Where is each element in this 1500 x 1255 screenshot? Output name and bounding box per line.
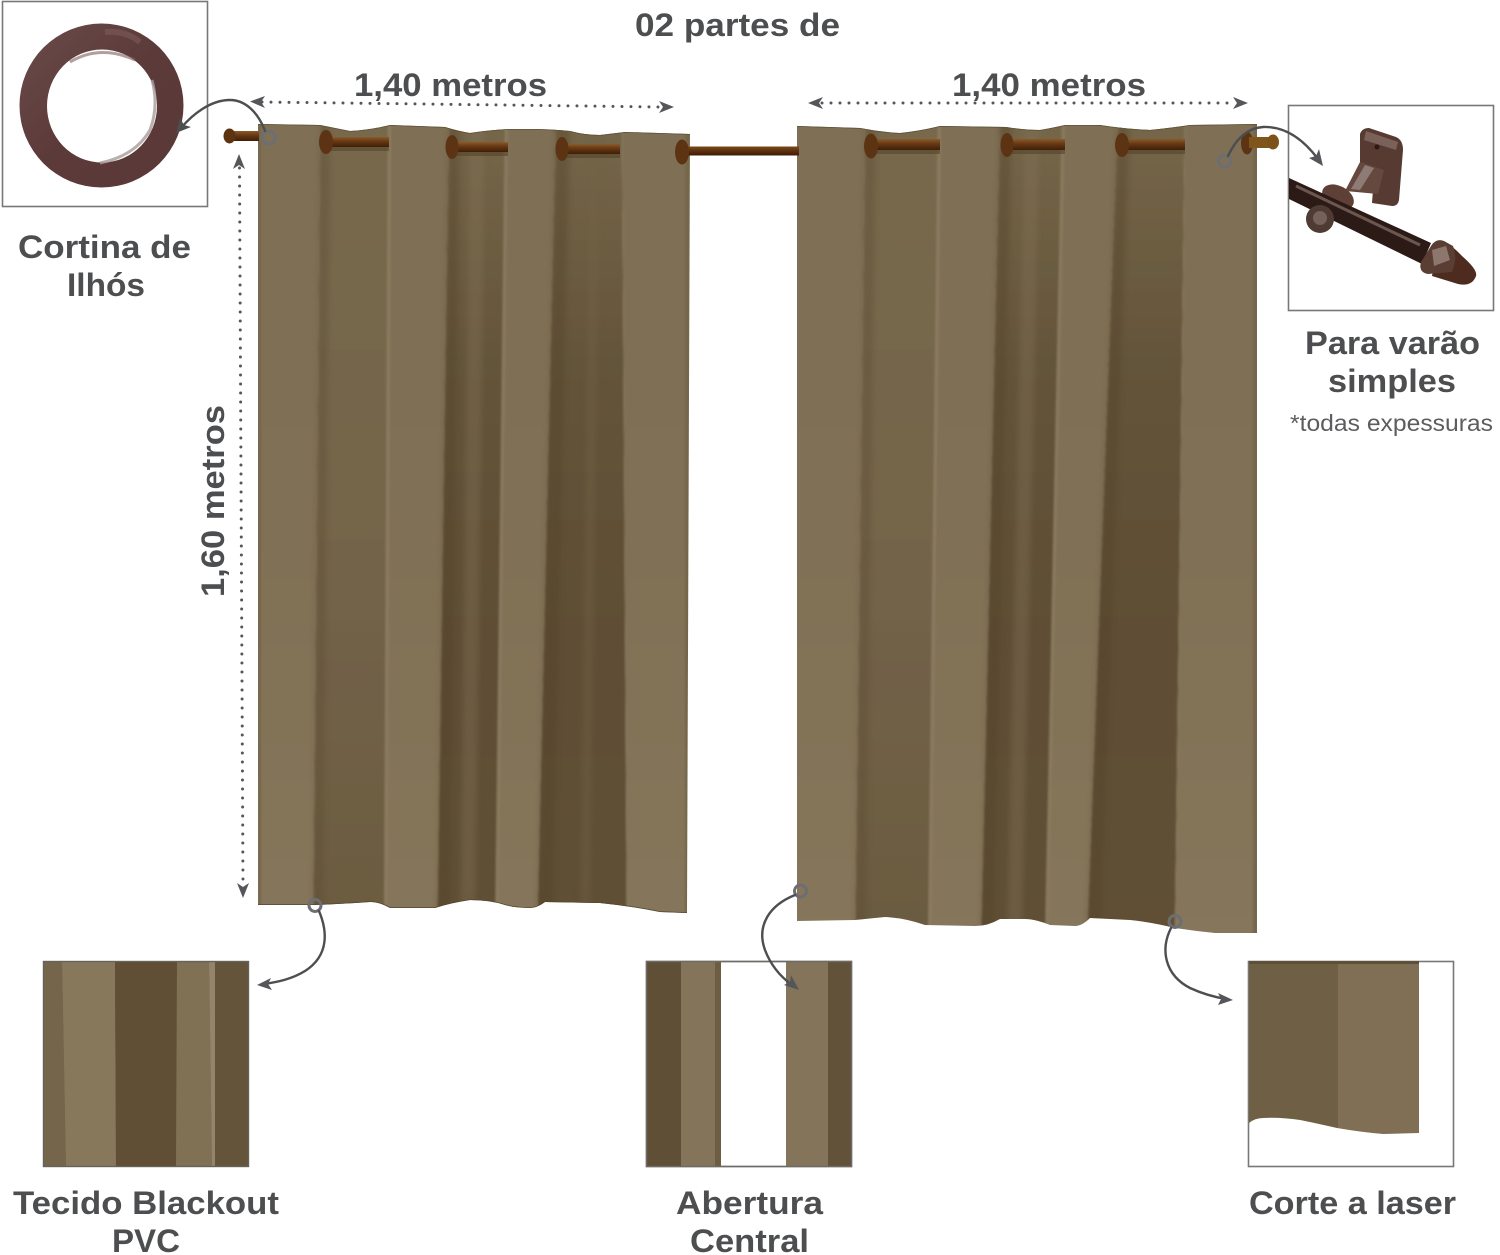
dimension: height: 1,60 metros — [195, 405, 231, 597]
arrow: hem to fabric detail — [257, 900, 325, 990]
arrow: curtain edge to opening detail — [762, 885, 806, 990]
label: Para varão simples: simples — [1328, 363, 1456, 399]
dimension: width left — [250, 67, 674, 113]
label: Abertura Central — [676, 1185, 823, 1255]
panel: grommet detail — [2, 2, 208, 206]
dimension: width right: 1,40 metros — [952, 67, 1146, 103]
right curtain grommets — [864, 132, 1279, 158]
arrow: curtain top to rod — [1218, 127, 1323, 167]
centre rod — [688, 146, 799, 156]
panel: laser cut detail — [1248, 961, 1454, 1166]
icon: curtain rod bracket — [1289, 128, 1476, 285]
left curtain grommets — [319, 130, 689, 164]
dimension: width right — [808, 67, 1248, 109]
arrow: curtain top to grommet — [176, 100, 276, 144]
label: Cortina de Ilhós: Ilhós — [67, 267, 145, 303]
label: Tecido Blackout PVC — [13, 1185, 279, 1255]
dimension: height — [195, 154, 249, 898]
curtain rod with grommets — [224, 128, 1279, 164]
icon: brown grommet ring — [20, 23, 184, 187]
right curtain panel — [790, 110, 1265, 940]
label: Para varão simples: *todas expessuras — [1290, 410, 1493, 436]
label: Tecido Blackout PVC: Tecido Blackout — [13, 1185, 279, 1221]
left finial — [224, 128, 259, 144]
left curtain panel — [250, 110, 700, 940]
label: Cortina de Ilhós: Cortina de — [18, 229, 191, 265]
label: Abertura Central: Abertura — [676, 1185, 823, 1221]
arrow: hem to laser cut detail — [1165, 916, 1233, 1005]
panel: rod detail — [1288, 106, 1494, 310]
label: Para varão simples — [1290, 325, 1493, 436]
title: 02 partes de — [635, 7, 840, 43]
label: Corte a laser: Corte a laser — [1249, 1185, 1456, 1221]
label: Para varão simples: Para varão — [1305, 325, 1480, 361]
panel: central opening detail — [646, 961, 852, 1167]
dimension: width left: 1,40 metros — [354, 67, 547, 103]
label: Cortina de Ilhós — [18, 229, 191, 303]
panel: fabric detail — [43, 961, 249, 1167]
